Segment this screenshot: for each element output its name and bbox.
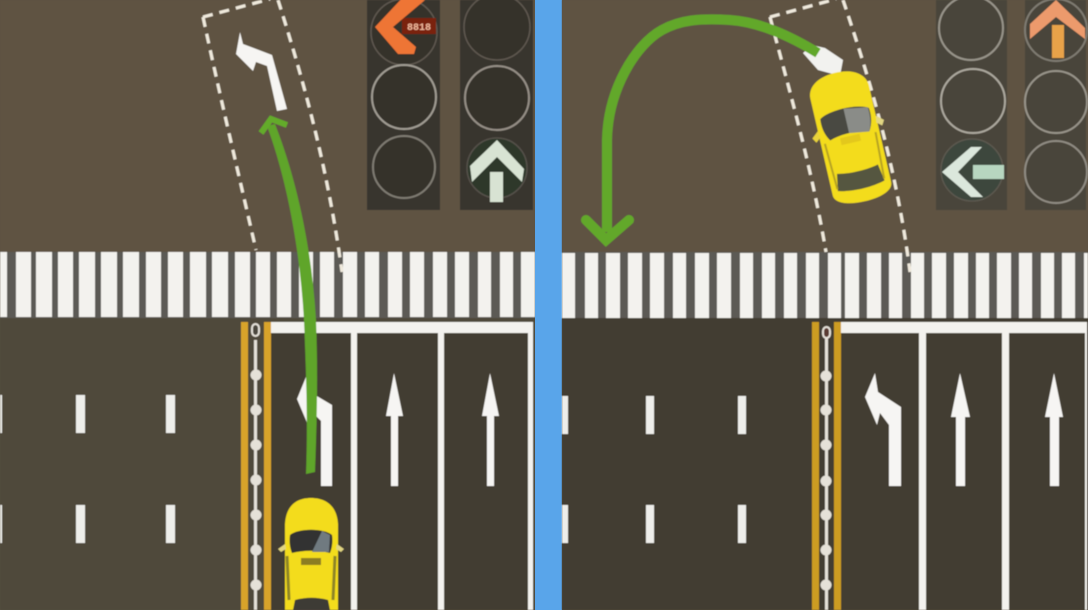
green U-turn arrow [586,19,818,240]
dashed lane lines [562,396,746,543]
median chain barrier [251,324,261,610]
panel: right intersection, step two [562,0,1088,610]
icon: green left arrow [942,147,1004,197]
icon: green up arrow [470,140,524,202]
road arrow: straight lane two [951,373,970,486]
icon: red left arrow with countdown [375,0,436,54]
icon: orange up arrow [1030,0,1085,58]
panel: left intersection, step one [0,0,535,610]
yellow car [278,498,344,610]
lane markings [241,322,533,610]
waiting zone dashed outline [203,0,342,272]
traffic signal: left-turn housing [367,0,440,210]
waiting zone left-turn arrow [236,32,287,111]
upper road surface [562,0,1088,252]
dashed lane lines [0,395,175,543]
traffic signal: straight housing [460,0,533,210]
road arrow: straight lane two [386,373,403,486]
lower road surface [562,318,1088,610]
crosswalk base [562,252,1088,318]
waiting zone arrow under car [803,45,843,76]
upper road surface [0,0,535,252]
green path arrow [261,119,317,474]
road arrow: straight lane three [482,373,499,486]
lane markings [812,322,1087,610]
traffic signal: straight housing [1025,0,1087,210]
center divider [535,0,562,610]
crosswalk base [0,252,535,318]
lanes surface [271,333,533,610]
median chain barrier [821,327,831,610]
road arrow: left turn [865,373,901,486]
crosswalk stripes [0,252,535,317]
traffic signal: left-turn housing [936,0,1007,210]
road arrow: straight lane three [1045,373,1063,486]
lower road surface [0,318,535,610]
road arrow: left turn and straight [297,372,332,486]
yellow car turning [799,64,901,210]
crosswalk stripes [562,253,1088,318]
icon: red left arrow with countdown: 8818 [407,23,431,34]
waiting zone dashed outline [770,0,910,272]
